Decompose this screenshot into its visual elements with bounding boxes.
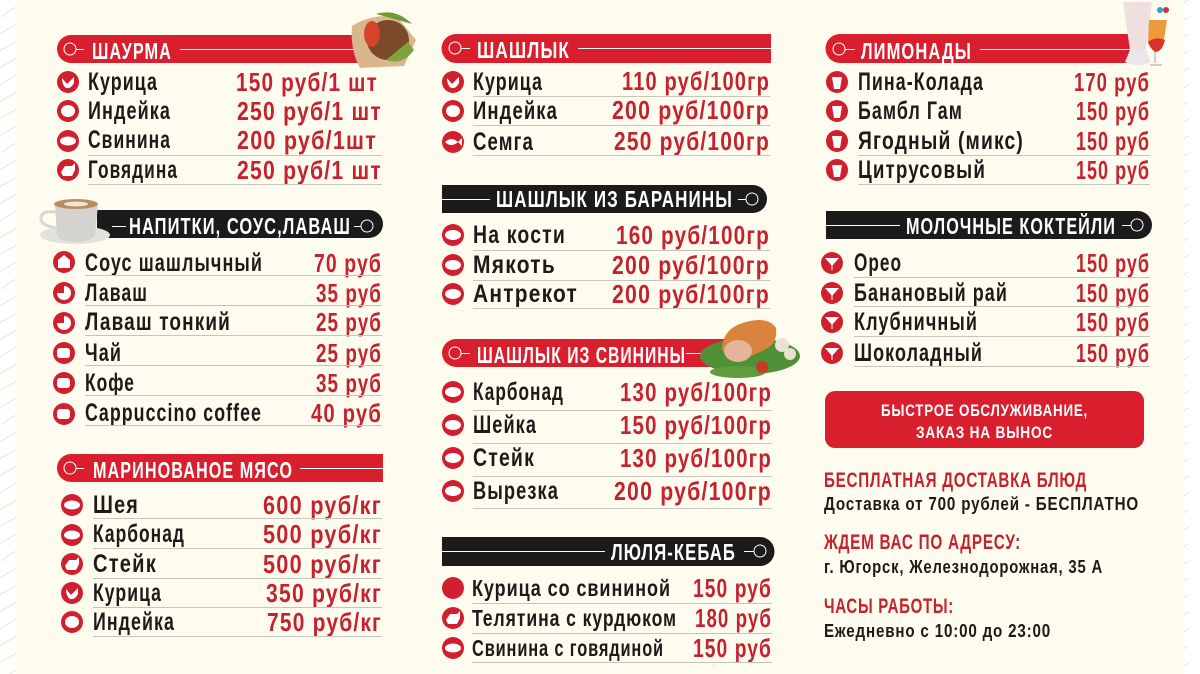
- heading: шашлык из баранины: ШАШЛЫК ИЗ БАРАНИНЫ: [496, 186, 733, 212]
- row: Карбонад: 130 руб/100гр: [620, 377, 772, 407]
- heading: лимонады: [826, 34, 1134, 64]
- row: Шея: 600 руб/кг: [263, 490, 382, 520]
- row: Телятина с курдюком: Телятина с курдюком: [472, 605, 677, 631]
- row: Чай: [53, 338, 382, 368]
- row: Ягодный (микс): [826, 126, 1150, 156]
- heading: шашлык из свинины: ШАШЛЫК ИЗ СВИНИНЫ: [477, 342, 686, 368]
- row: Орео: Орео: [854, 249, 902, 277]
- row: Курица: [57, 67, 378, 97]
- row: Свинина: 200 руб/1шт: [237, 125, 377, 155]
- row: Мякоть: 200 руб/100гр: [612, 250, 770, 280]
- row: Курица: 110 руб/100гр: [622, 66, 770, 96]
- row: Карбонад: [61, 519, 382, 549]
- panel: молочные коктейли: [821, 211, 1152, 368]
- row: Лаваш: [53, 278, 382, 308]
- row: Карбонад: Карбонад: [93, 520, 185, 548]
- row: Лаваш: 35 руб: [316, 278, 382, 308]
- row: Курица со свининой: [442, 573, 772, 604]
- panel: шаурма: [57, 12, 416, 185]
- row: Курица со свининой: 150 руб: [693, 573, 772, 603]
- row: Вырезка: Вырезка: [473, 477, 559, 505]
- row: Банановый рай: [821, 278, 1150, 308]
- row: Вырезка: [442, 476, 772, 508]
- row: Стейк: Стейк: [93, 550, 157, 578]
- row: Стейк: 500 руб/кг: [263, 549, 382, 579]
- row: Кофе: 35 руб: [316, 368, 382, 398]
- text block: часы работы: Ежедневно с 10:00 до 23:00: [824, 620, 1051, 641]
- row: Свинина с говядиной: 150 руб: [693, 633, 772, 663]
- row: Лаваш тонкий: [53, 307, 382, 337]
- row: Курица: 350 руб/кг: [266, 578, 382, 608]
- heading: мариноване мясо: МАРИНОВАНОЕ МЯСО: [93, 457, 293, 483]
- row: Курица: 150 руб/1 шт: [236, 67, 378, 97]
- row: Телятина с курдюком: [442, 603, 772, 634]
- row: Шоколадный: [821, 338, 1150, 368]
- row: Индейка: 750 руб/кг: [267, 607, 382, 637]
- heading: напитки: [97, 210, 383, 239]
- row: Цитрусовый: [826, 155, 1150, 185]
- row: Шейка: [442, 410, 772, 444]
- row: Бамбл Гам: Бамбл Гам: [858, 97, 963, 125]
- panel: шашлык из баранины: [442, 185, 770, 309]
- row: Семга: [442, 126, 770, 156]
- row: Чай: Чай: [85, 339, 122, 367]
- text block: часы работы: ЧАСЫ РАБОТЫ:: [824, 595, 954, 618]
- row: Индейка: [61, 607, 382, 637]
- row: Шея: [61, 490, 382, 520]
- row: Семга: Семга: [473, 128, 534, 156]
- heading: лимонады: ЛИМОНАДЫ: [861, 38, 972, 64]
- row: Чай: 25 руб: [316, 338, 382, 368]
- row: Цитрусовый: 150 руб: [1076, 155, 1150, 185]
- heading: молочные коктейли: [826, 211, 1152, 239]
- row: Семга: 250 руб/100гр: [614, 126, 770, 156]
- row: Говядина: Говядина: [88, 156, 178, 184]
- row: Цитрусовый: Цитрусовый: [858, 156, 986, 184]
- row: Индейка: [442, 95, 770, 126]
- callout: быстрое обслуживание: [825, 391, 1144, 448]
- row: Клубничный: Клубничный: [854, 308, 978, 336]
- row: Индейка: Индейка: [93, 608, 175, 636]
- row: Банановый рай: Банановый рай: [854, 279, 1008, 307]
- row: Шейка: 150 руб/100гр: [620, 410, 772, 440]
- row: Шоколадный: Шоколадный: [854, 339, 983, 367]
- row: Мякоть: Мякоть: [473, 251, 556, 279]
- text block: доставка: [824, 469, 1139, 514]
- icon: shawarma wrap photo: [352, 12, 416, 68]
- row: Индейка: 250 руб/1 шт: [237, 96, 382, 126]
- row: Говядина: 250 руб/1 шт: [237, 155, 382, 185]
- text block: адрес: ЖДЕМ ВАС ПО АДРЕСУ:: [823, 531, 1021, 554]
- heading: шашлык: [442, 34, 771, 63]
- row: Индейка: Индейка: [88, 97, 171, 125]
- row: Индейка: [57, 96, 382, 126]
- row: На кости: На кости: [473, 221, 566, 249]
- row: Свинина: Свинина: [88, 126, 171, 154]
- row: Свинина с говядиной: Свинина с говядиной: [472, 635, 664, 661]
- row: Курица: Курица: [88, 68, 158, 96]
- heading: люля-кебаб: ЛЮЛЯ-КЕБАБ: [611, 539, 736, 565]
- heading: молочные коктейли: МОЛОЧНЫЕ КОКТЕЙЛИ: [906, 212, 1116, 239]
- row: Кофе: [53, 368, 382, 398]
- row: Cappuccino coffee: 40 руб: [311, 398, 382, 428]
- icon: coffee cup photo: [40, 199, 110, 244]
- heading: шашлык: ШАШЛЫК: [477, 37, 570, 63]
- callout: быстрое обслуживание: ЗАКАЗ НА ВЫНОС: [916, 423, 1053, 442]
- row: Лаваш: Лаваш: [85, 279, 148, 307]
- heading: шаурма: ШАУРМА: [92, 38, 172, 64]
- row: Карбонад: [442, 377, 772, 410]
- row: Индейка: 200 руб/100гр: [612, 95, 770, 125]
- text block: доставка: Доставка от 700 рублей - БЕСПЛАТНО: [824, 493, 1139, 514]
- row: Стейк: Стейк: [473, 444, 535, 472]
- panel: мариновое мясо: [57, 454, 383, 637]
- row: Банановый рай: 150 руб: [1076, 278, 1150, 308]
- text block: адрес: [823, 531, 1103, 577]
- row: Антрекот: Антрекот: [473, 280, 578, 308]
- row: Говядина: [57, 155, 382, 185]
- row: Курица: Курица: [473, 68, 543, 96]
- row: Телятина с курдюком: 180 руб: [695, 603, 772, 633]
- row: Курица со свининой: Курица со свининой: [472, 575, 671, 601]
- row: Орео: 150 руб: [1076, 248, 1150, 278]
- panel: шашлык из свинины: [442, 320, 800, 508]
- row: Бамбл Гам: [826, 96, 1150, 126]
- row: На кости: 160 руб/100гр: [616, 220, 770, 250]
- row: Индейка: Индейка: [473, 97, 558, 125]
- panel: люля-кебаб: [442, 537, 774, 663]
- row: Пина-Колада: 170 руб: [1074, 67, 1150, 97]
- row: Вырезка: 200 руб/100гр: [614, 476, 772, 506]
- heading: шашлык из свинины: [442, 339, 730, 368]
- panel: лимонады: [826, 2, 1169, 185]
- heading: люля-кебаб: [442, 537, 774, 566]
- row: Мякоть: [442, 250, 770, 280]
- row: Cappuccino coffee: Cappuccino coffee: [85, 399, 262, 427]
- callout: быстрое обслуживание: БЫСТРОЕ ОБСЛУЖИВАНИЕ,: [881, 401, 1088, 420]
- row: Шейка: Шейка: [473, 411, 537, 439]
- row: Стейк: [61, 549, 382, 579]
- row: Стейк: [442, 443, 772, 476]
- panel: шашлык: [442, 34, 771, 156]
- row: Шоколадный: 150 руб: [1076, 338, 1150, 368]
- row: Антрекот: [442, 279, 770, 309]
- row: Лаваш тонкий: 25 руб: [316, 307, 382, 337]
- row: Соус шашлычный: Соус шашлычный: [85, 249, 263, 277]
- row: Клубничный: 150 руб: [1076, 307, 1150, 337]
- text block: адрес: г. Югорск, Железнодорожная, 35 А: [824, 556, 1103, 577]
- row: Кофе: Кофе: [85, 369, 135, 397]
- row: Антрекот: 200 руб/100гр: [612, 279, 770, 309]
- row: Орео: [821, 248, 1150, 278]
- row: Курица: Курица: [93, 579, 162, 607]
- row: Пина-Колада: Пина-Колада: [858, 68, 984, 96]
- panel: напитки, соус, лаваш: [40, 199, 383, 428]
- row: Стейк: 130 руб/100гр: [620, 443, 772, 473]
- icon: roast meat photo: [700, 320, 800, 378]
- row: Карбонад: Карбонад: [473, 378, 564, 406]
- row: Пина-Колада: [826, 67, 1150, 97]
- row: Ягодный (микс): 150 руб: [1076, 126, 1150, 156]
- row: Свинина: [57, 125, 382, 156]
- row: Курица: [442, 66, 770, 96]
- heading: шашлык из баранины: [442, 185, 767, 213]
- row: Шея: Шея: [93, 491, 139, 519]
- row: Ягодный (микс): Ягодный (микс): [858, 127, 1024, 155]
- row: На кости: [442, 220, 770, 250]
- text block: доставка: БЕСПЛАТНАЯ ДОСТАВКА БЛЮД: [824, 469, 1087, 492]
- heading: шаурма: [57, 35, 372, 64]
- text block: часы работы: [824, 595, 1051, 641]
- row: Курица: [61, 578, 382, 608]
- icon: milkshake and cocktail glasses: [1123, 2, 1169, 65]
- row: Лаваш тонкий: Лаваш тонкий: [85, 308, 231, 336]
- row: Соус шашлычный: 70 руб: [314, 248, 382, 278]
- row: Клубничный: [821, 307, 1150, 337]
- row: Бамбл Гам: 150 руб: [1076, 96, 1150, 126]
- heading: напитки: НАПИТКИ, СОУС,ЛАВАШ: [129, 213, 351, 239]
- row: Карбонад: 500 руб/кг: [263, 519, 382, 549]
